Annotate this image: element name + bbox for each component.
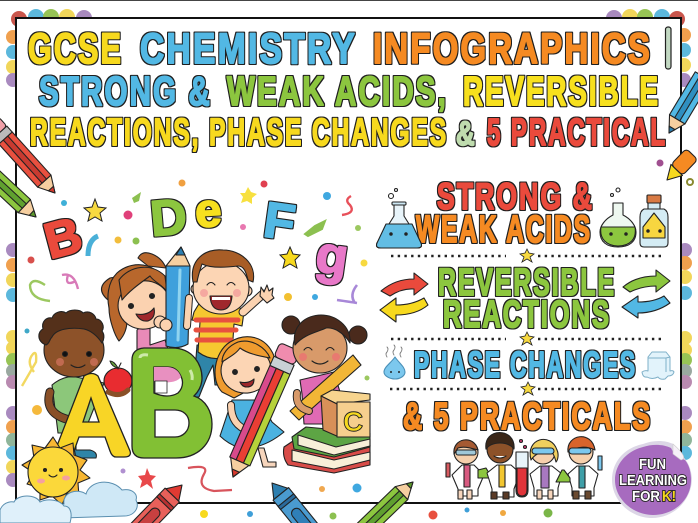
kid: boy with curly hair	[39, 310, 104, 458]
title: GCSE	[28, 25, 123, 73]
icon: red apple	[104, 361, 132, 395]
divider 2	[391, 332, 664, 345]
scientist 3	[530, 439, 562, 499]
arrows: right pair	[622, 270, 670, 318]
pencil: green bottom	[352, 476, 419, 523]
icon: ice cube	[642, 352, 674, 379]
scientist 1	[446, 440, 492, 499]
big letter A	[55, 374, 130, 457]
heading: strong and weak acids	[416, 176, 594, 251]
title: STRONG &	[39, 68, 212, 114]
divider 1	[391, 249, 664, 262]
title	[28, 25, 671, 154]
pencil: blue right	[661, 72, 698, 138]
pencil: green top left	[0, 165, 42, 224]
heading: reversible reactions	[438, 262, 616, 336]
kid: girl with brown hair	[101, 253, 174, 355]
floating letters: F	[260, 191, 299, 251]
icon: tall blue pencil	[160, 247, 190, 348]
badge: fun learning: LEARNING	[619, 472, 687, 489]
confetti	[22, 180, 370, 492]
badge: fun learning: K!	[662, 488, 676, 505]
icon: smiling sun	[22, 437, 90, 505]
title: WEAK ACIDS,	[227, 68, 448, 114]
floating letters: g	[312, 225, 352, 287]
title: REACTIONS, PHASE CHANGES	[30, 112, 448, 154]
icon: clouds	[0, 482, 137, 523]
floating letters: e	[194, 183, 223, 237]
icon: acid bottle	[640, 195, 668, 247]
heading: strong and weak acids: WEAK ACIDS	[416, 209, 592, 251]
corner dots	[200, 160, 693, 520]
pencil: red top left	[0, 117, 62, 199]
heading: reversible reactions: REACTIONS	[443, 294, 611, 336]
icon: letter block	[321, 390, 370, 437]
big letter B	[132, 348, 212, 458]
badge: fun learning: FOR	[632, 488, 660, 505]
badge: fun learning: FUN	[639, 456, 666, 473]
pencil: orange right	[661, 149, 698, 186]
icon: round flask	[600, 188, 636, 247]
icon: big rainbow pencil	[223, 343, 300, 481]
scientist 2	[486, 432, 520, 499]
title: CHEMISTRY	[140, 25, 357, 73]
kid: laughing boy in stripes	[187, 250, 274, 397]
test tube	[516, 440, 528, 497]
kid: girl with bunches and ruler	[282, 315, 367, 424]
icon: stack of books	[284, 427, 370, 473]
floating letters: D	[148, 188, 189, 247]
icon: water drop	[384, 345, 405, 379]
icon: conical flask	[376, 188, 422, 248]
crayon: red bottom	[123, 478, 189, 523]
scientist 4	[556, 437, 602, 499]
floating letters	[38, 183, 352, 287]
kid: blonde girl with pencil	[215, 337, 284, 467]
badge: fun learning	[612, 441, 692, 518]
arrows: left pair	[380, 273, 428, 322]
scientists	[446, 432, 602, 499]
crayon: blue bottom	[264, 477, 326, 523]
icon: letter block: C	[343, 406, 363, 437]
title: &	[456, 115, 477, 153]
divider 3	[390, 382, 664, 395]
heading: strong and weak acids: STRONG &	[437, 176, 594, 217]
floating letters: B	[38, 206, 88, 270]
